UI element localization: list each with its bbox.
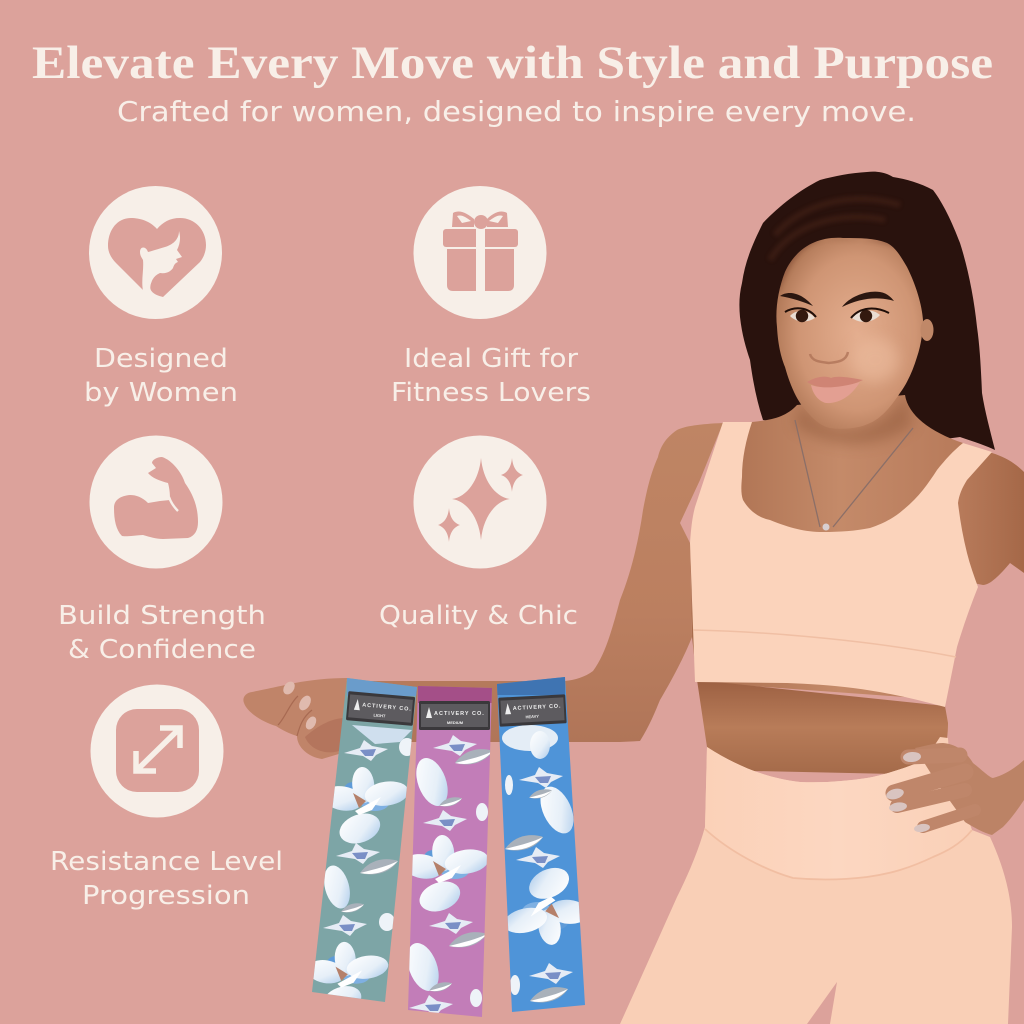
face bbox=[775, 238, 925, 429]
feature: ideal gift bbox=[391, 186, 591, 408]
icon: diagonal arrow in rounded square bbox=[90, 684, 224, 818]
eyes bbox=[785, 308, 889, 322]
necklace bbox=[795, 420, 913, 527]
tag: light: ACTIVERY CO. bbox=[362, 702, 412, 713]
eyebrows bbox=[780, 292, 894, 307]
nose bbox=[810, 352, 848, 363]
title: Elevate Every Move with Style and Purpose bbox=[32, 37, 993, 89]
tag: heavy: ACTIVERY CO. bbox=[513, 703, 561, 712]
torso and right shoulder bbox=[690, 395, 1024, 700]
ear bbox=[920, 319, 934, 341]
label: Designed bbox=[94, 344, 228, 374]
tag: heavy: HEAVY bbox=[525, 714, 539, 719]
icon: gift box bbox=[414, 186, 546, 319]
tag: light bbox=[346, 691, 415, 726]
label: Ideal Gift for bbox=[404, 344, 579, 374]
tag: heavy bbox=[498, 694, 567, 727]
label: Progression bbox=[82, 881, 250, 911]
fingernails bbox=[885, 751, 930, 833]
icon: sparkles bbox=[414, 436, 546, 568]
label: Resistance Level bbox=[50, 847, 283, 877]
band: heavy blue bbox=[497, 677, 593, 1012]
feature: resistance level progression bbox=[50, 684, 283, 911]
icon: flexed arm bbox=[90, 436, 222, 568]
arm holding bands bbox=[340, 423, 723, 742]
leggings bbox=[620, 737, 1012, 1024]
leggings waistband bbox=[705, 747, 972, 879]
necklace pendant bbox=[822, 524, 830, 530]
label: by Women bbox=[84, 378, 238, 408]
tag: medium: MEDIUM bbox=[447, 720, 464, 725]
label: Quality & Chic bbox=[379, 601, 578, 631]
label: Build Strength bbox=[58, 601, 266, 631]
feature: quality and chic bbox=[379, 436, 578, 631]
hand on hip bbox=[885, 743, 1024, 835]
label: Fitness Lovers bbox=[391, 378, 591, 408]
label: & Confidence bbox=[68, 635, 256, 665]
crop top bbox=[690, 422, 992, 707]
hand holding bands bbox=[243, 678, 347, 759]
hair bbox=[739, 172, 995, 450]
tag: light: LIGHT bbox=[373, 712, 386, 719]
feature: designed by women bbox=[84, 186, 238, 408]
lips bbox=[807, 377, 863, 403]
midriff bbox=[697, 680, 948, 775]
neck shadow bbox=[795, 390, 912, 444]
band: medium pink bbox=[401, 686, 493, 1017]
fingernails bbox=[281, 679, 318, 731]
tag: medium: ACTIVERY CO. bbox=[434, 711, 485, 717]
tag: medium bbox=[419, 701, 490, 730]
model photo bbox=[243, 172, 1024, 1024]
feature: build strength bbox=[58, 436, 266, 665]
crop top band line bbox=[693, 630, 956, 657]
subtitle: Crafted for women, designed to inspire every move. bbox=[117, 95, 916, 128]
band: light teal bbox=[312, 678, 417, 1002]
icon: heart with woman silhouette bbox=[89, 186, 222, 319]
